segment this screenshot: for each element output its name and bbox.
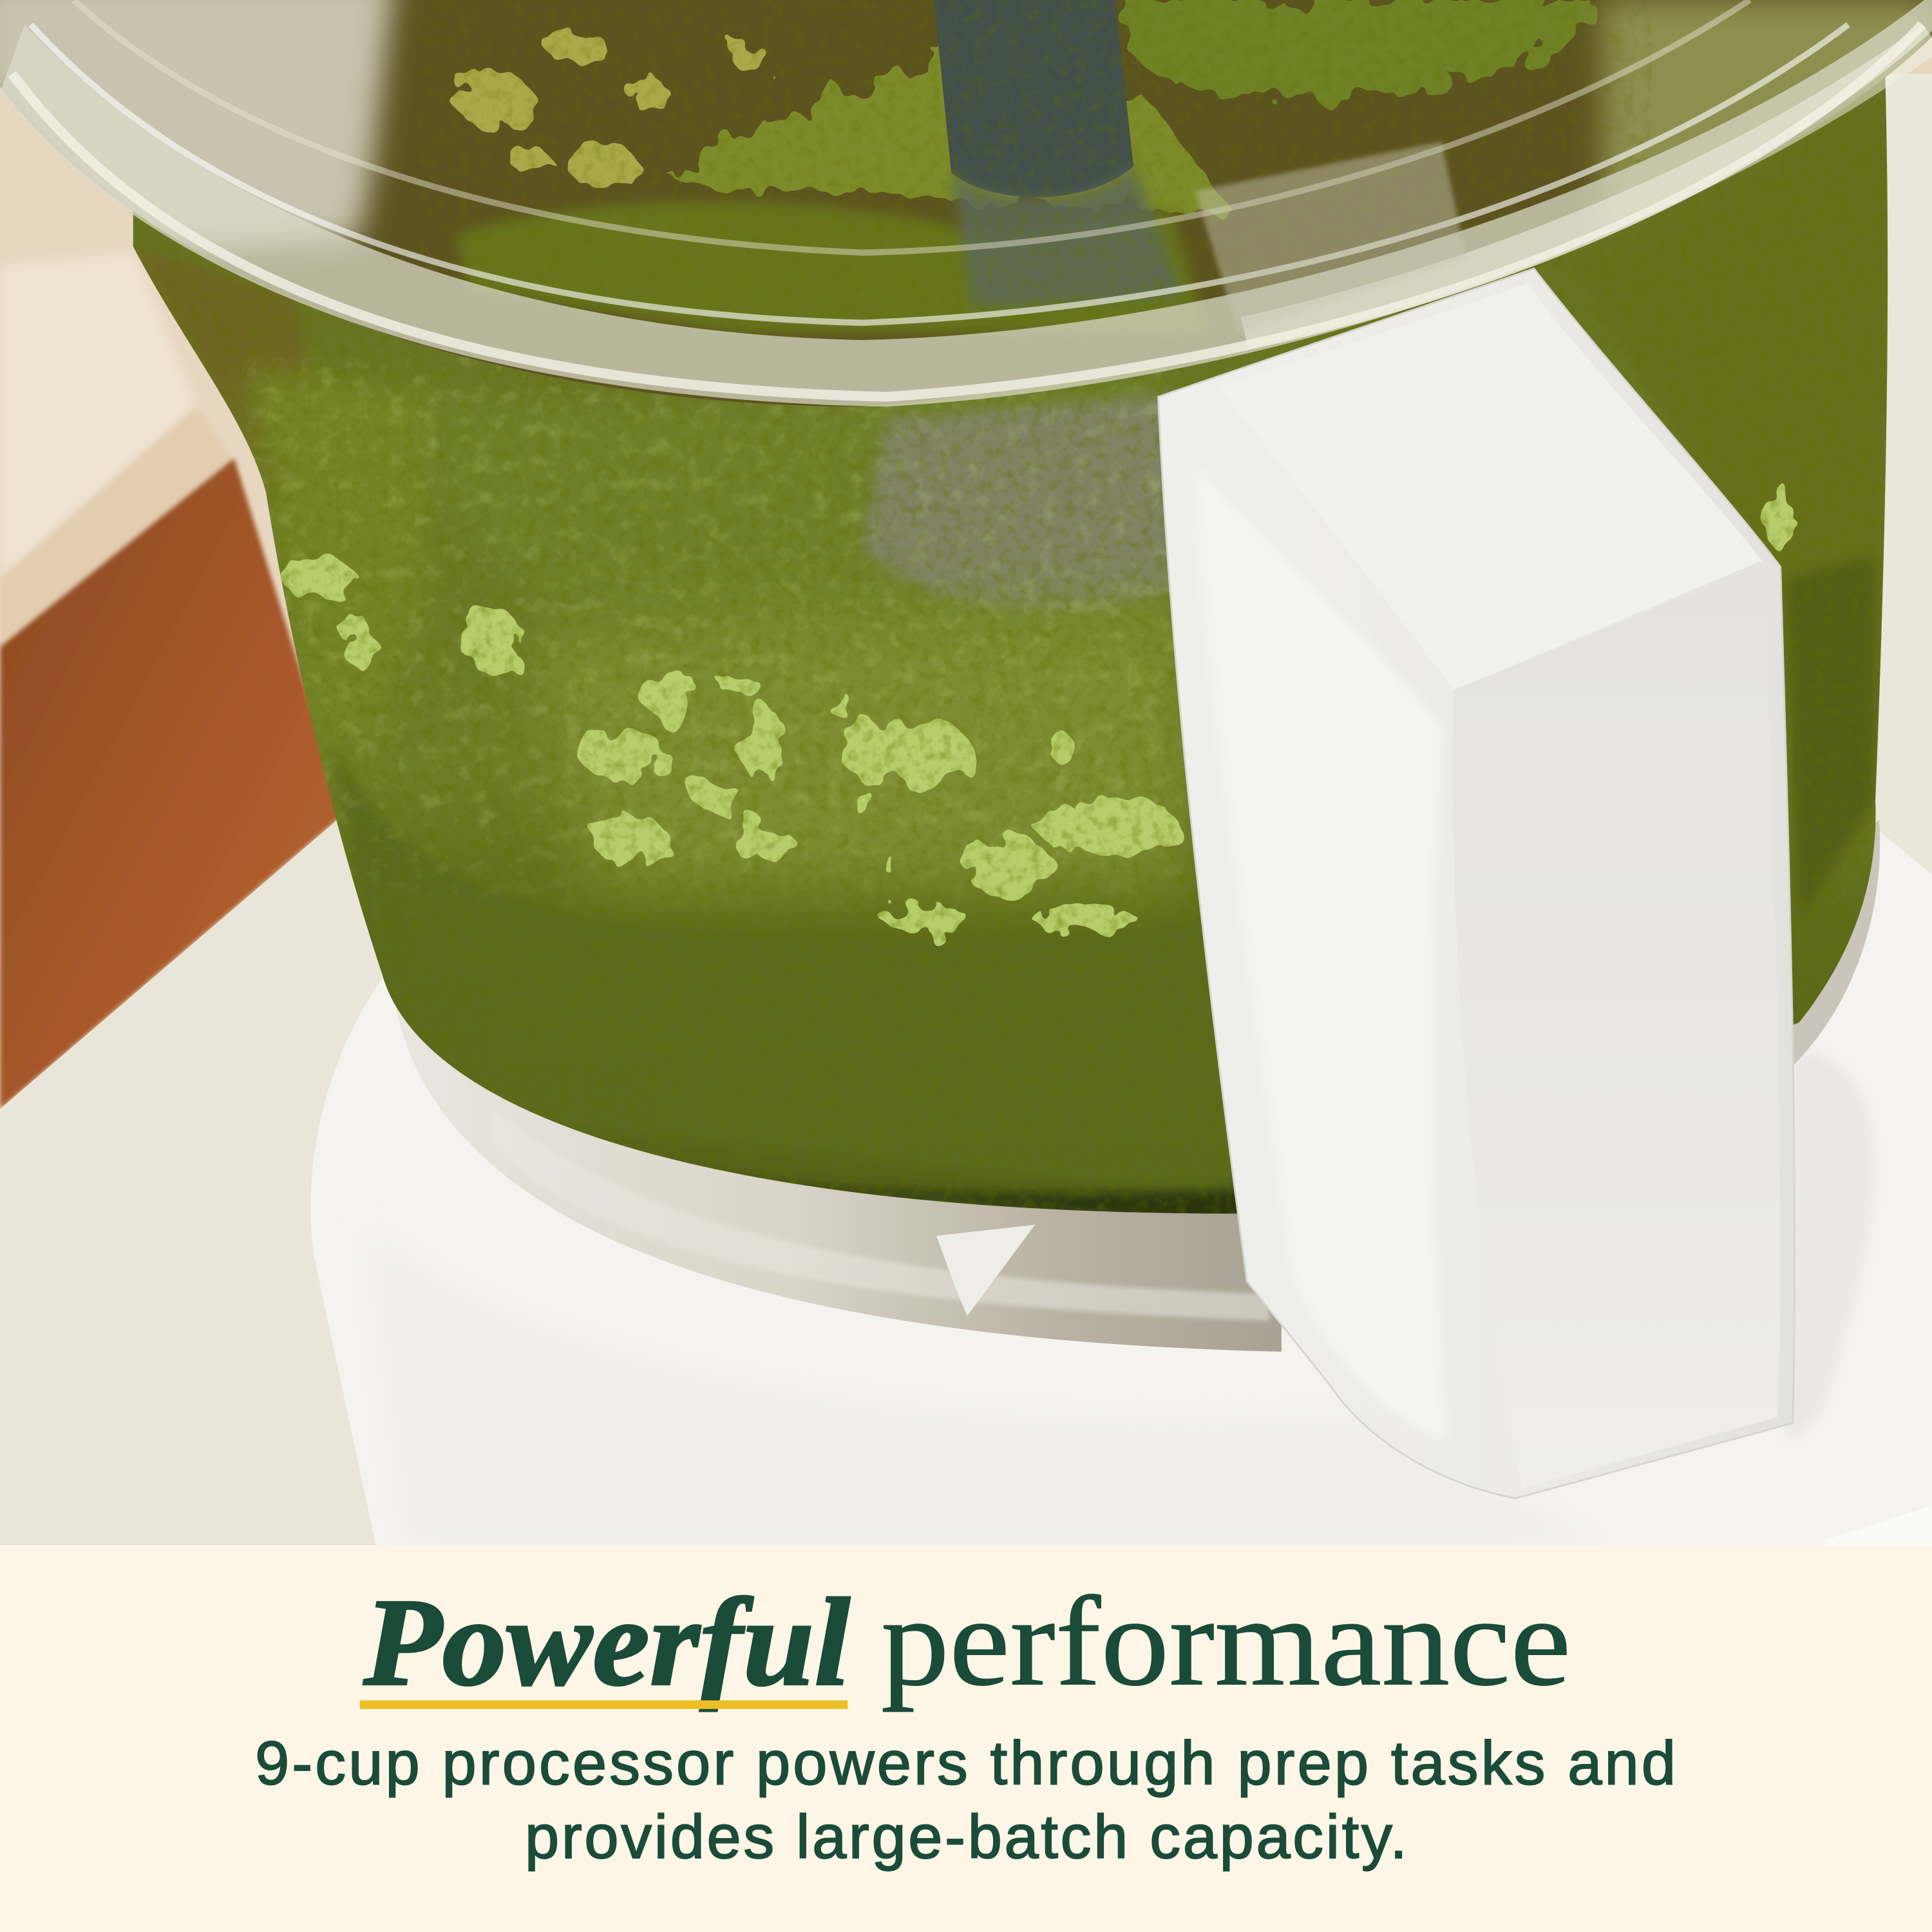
upper-left green zone — [243, 365, 426, 712]
glass reflection area — [450, 385, 1142, 531]
heading: performance — [881, 1571, 1571, 1712]
dark edge at bottom — [518, 1140, 1244, 1226]
pesto lower mound — [456, 202, 1208, 333]
handle front face — [1453, 564, 1780, 1488]
left amber edge — [135, 251, 303, 493]
appliance base — [310, 826, 1932, 1545]
right bowl rim — [1602, 0, 1932, 247]
handle inner recess — [1195, 468, 1448, 1442]
countertop right — [1848, 74, 1932, 936]
lower dark band — [333, 739, 1244, 1201]
handle top face — [1220, 283, 1762, 690]
white handle — [1158, 269, 1795, 1499]
right ring — [1786, 819, 1880, 1066]
mid band — [530, 604, 1183, 887]
wood floor — [0, 459, 345, 1109]
photo: food processor with pesto — [0, 0, 1932, 1545]
pesto upper right — [1128, 0, 1589, 102]
ring inner light band — [493, 1109, 1269, 1321]
speckles — [456, 32, 766, 184]
clear lid rim — [0, 0, 1932, 406]
bowl of pesto — [123, 74, 1897, 1226]
lid latch — [1195, 142, 1466, 333]
background wall — [0, 0, 1932, 1545]
blade stem — [934, 0, 1133, 197]
text panel — [0, 1545, 1932, 1932]
description: 9-cup processor powers through prep tasks and — [255, 1728, 1676, 1797]
metal ring under bowl — [392, 986, 1282, 1352]
left clear lid — [0, 0, 394, 252]
texture grain — [123, 74, 1897, 1220]
yellow underline — [360, 1700, 848, 1709]
heading: Powerful — [363, 1573, 850, 1712]
heading — [363, 1571, 1571, 1712]
description: provides large-batch capacity. — [525, 1803, 1407, 1871]
view into bowl above lid rim — [0, 0, 1932, 419]
countertop — [0, 813, 419, 1545]
stem shadow — [862, 394, 1171, 612]
right pesto — [1577, 123, 1885, 924]
description — [255, 1728, 1676, 1871]
bowl bright blotches — [283, 483, 1793, 931]
ring highlight — [936, 1225, 1035, 1316]
pesto upper center — [677, 50, 1232, 209]
